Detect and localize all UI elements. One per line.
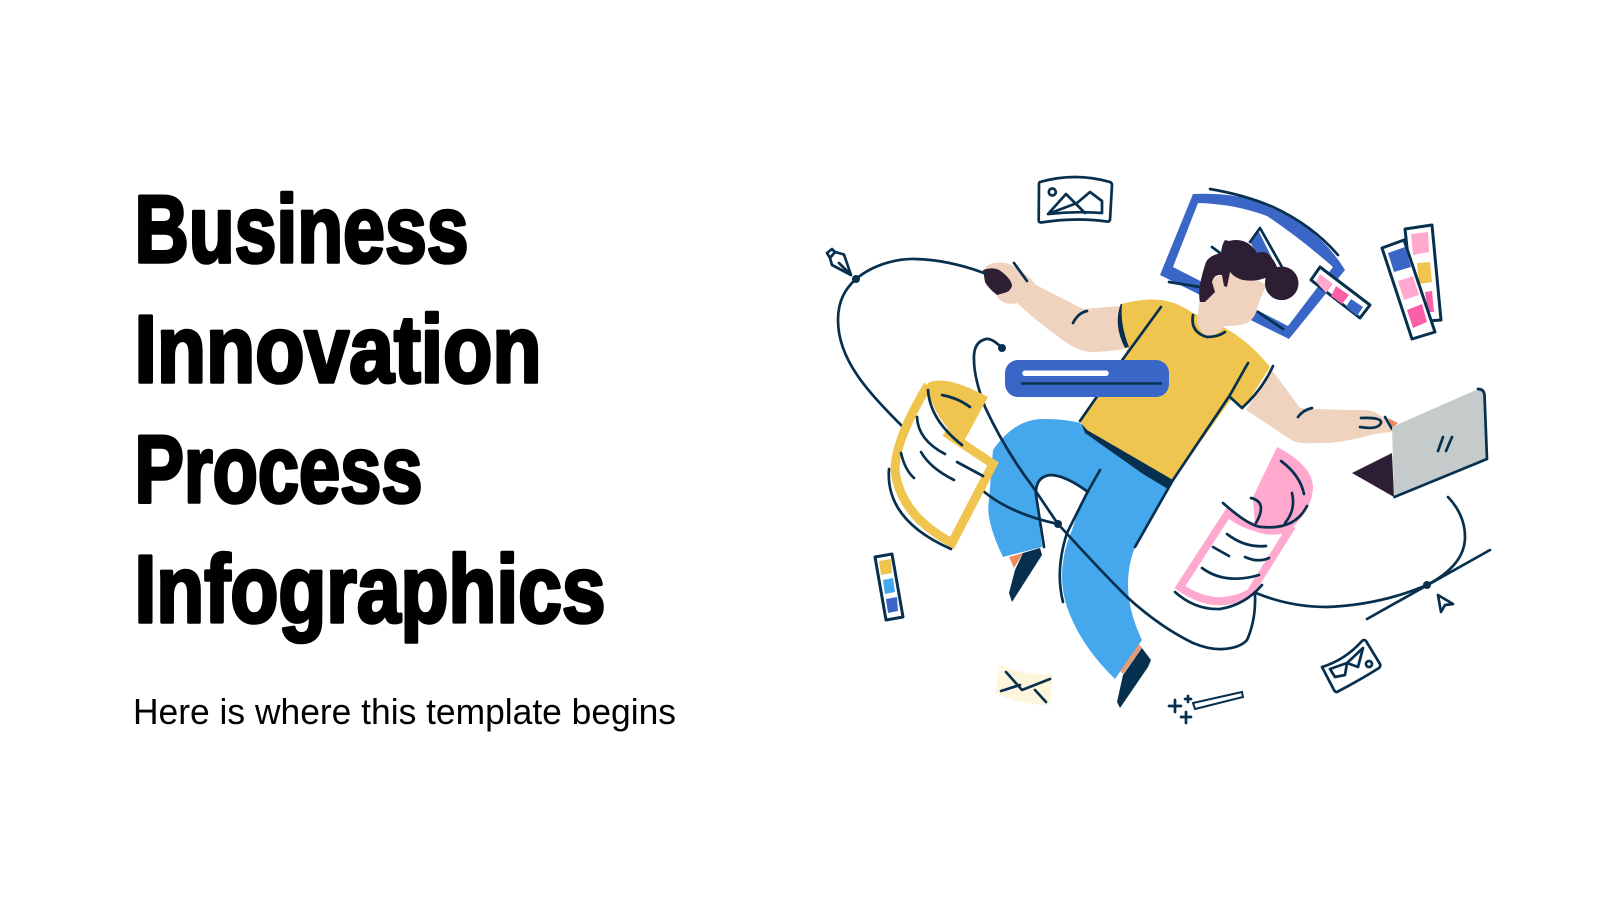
pink document xyxy=(1175,447,1313,609)
head and hair xyxy=(1193,240,1298,337)
title: Business xyxy=(134,176,468,283)
trouser seams xyxy=(1036,470,1173,602)
icon: picture frame xyxy=(1039,177,1112,222)
vertical colour chip xyxy=(875,554,903,620)
yellow document xyxy=(889,380,993,549)
right arm xyxy=(1246,370,1398,443)
search bar xyxy=(1005,360,1169,397)
icon: cursor arrow xyxy=(1438,595,1453,612)
right shoe xyxy=(1117,644,1151,708)
colour swatch fan xyxy=(1382,225,1441,339)
laptop xyxy=(1352,389,1487,497)
title: Process xyxy=(134,416,422,523)
motion path curves xyxy=(838,259,1490,649)
icon: photo card xyxy=(1322,640,1380,692)
T-shirt xyxy=(1080,300,1273,480)
title: Innovation xyxy=(134,296,542,403)
left shoe xyxy=(1009,548,1042,602)
title: Infographics xyxy=(134,536,606,643)
trousers xyxy=(988,419,1168,679)
icon: envelope xyxy=(995,665,1053,705)
title xyxy=(134,176,606,643)
icon: magic wand sparkles xyxy=(1169,692,1243,723)
subtitle: Here is where this template begins xyxy=(133,691,676,732)
shirt hem shadow xyxy=(1080,420,1173,489)
small colour swatch strip xyxy=(1311,267,1370,318)
left arm with mouse xyxy=(983,263,1125,352)
monitor frame xyxy=(1160,189,1345,339)
illustration: designer surrounded by creative tools xyxy=(827,177,1490,723)
icon: pen tool nib xyxy=(827,249,851,275)
